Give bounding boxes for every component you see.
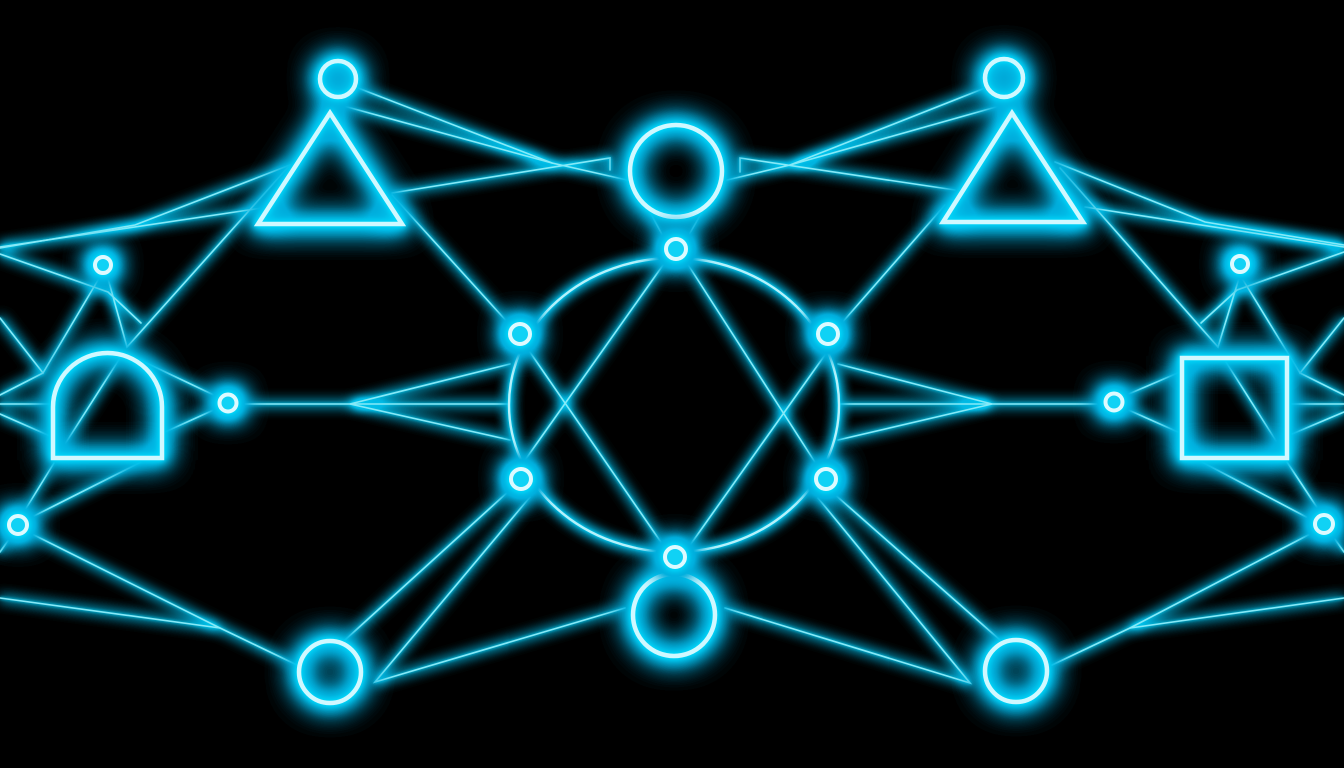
central ellipse	[509, 258, 839, 552]
small glowing nodes	[9, 239, 1333, 567]
node: top left large	[320, 61, 356, 97]
node: left middle	[220, 394, 236, 412]
icon: top left triangle	[258, 113, 402, 224]
node: right bottom	[1315, 515, 1333, 533]
node: ellipse upper left	[510, 324, 530, 344]
icon: bottom left circle	[299, 641, 361, 703]
node: ellipse lower left	[511, 469, 531, 489]
neon shapes	[53, 59, 1287, 703]
icon: top right triangle	[943, 113, 1083, 222]
icon: bottom center circle	[633, 574, 715, 656]
icon: top center circle	[630, 125, 722, 217]
node: right middle	[1106, 394, 1122, 410]
left network lines	[0, 88, 627, 682]
node: lower center	[665, 547, 685, 567]
icon: bottom right circle	[985, 640, 1047, 702]
node: ellipse lower right	[816, 469, 836, 489]
node: left top	[95, 257, 111, 273]
connecting lines	[0, 88, 1344, 683]
icon: left dome	[53, 353, 162, 458]
center lines	[518, 212, 832, 548]
node: ellipse upper right	[818, 324, 838, 344]
node: right top	[1232, 256, 1248, 272]
right network lines	[725, 88, 1344, 683]
node: top right large	[985, 59, 1023, 97]
node: upper center	[666, 239, 686, 259]
icon: right square	[1182, 358, 1287, 458]
node: left bottom	[9, 516, 27, 534]
